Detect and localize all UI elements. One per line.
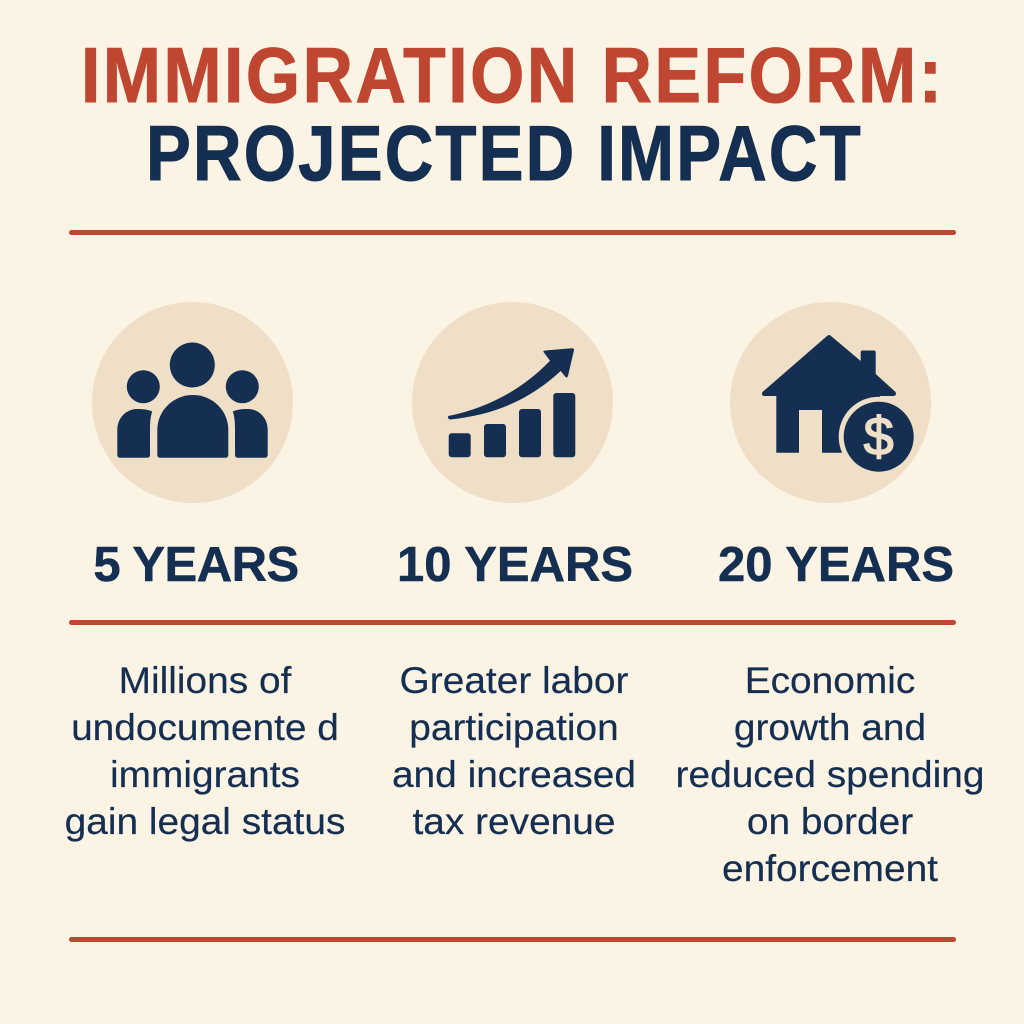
text: 5 years outcome: gain legal status bbox=[65, 801, 345, 842]
text: 10 years outcome: participation bbox=[409, 707, 618, 748]
icon: house with dollar: $ bbox=[864, 407, 894, 467]
icon: people group bbox=[92, 302, 293, 503]
text: 10 years outcome: and increased bbox=[391, 754, 636, 795]
text: 20 years outcome: growth and bbox=[734, 707, 926, 748]
title: IMMIGRATION REFORM: bbox=[81, 31, 944, 119]
icon: growth chart bbox=[412, 302, 613, 503]
text: 5 years outcome: immigrants bbox=[110, 754, 300, 795]
text: 5 years outcome bbox=[65, 660, 345, 842]
text: 10 years outcome: Greater labor bbox=[399, 660, 628, 701]
text: 5 years outcome: undocumente d bbox=[71, 707, 339, 748]
text: 20 years outcome: on border bbox=[747, 801, 913, 842]
text: 10 years outcome: tax revenue bbox=[412, 801, 615, 842]
text: 20 years outcome bbox=[676, 660, 984, 889]
text: 20 years outcome: reduced spending bbox=[676, 754, 984, 795]
label: 20 years: 20 YEARS bbox=[718, 538, 954, 592]
text: 20 years outcome: Economic bbox=[745, 660, 915, 701]
text: 10 years outcome bbox=[391, 660, 636, 842]
title bbox=[81, 31, 944, 197]
label: 10 years: 10 YEARS bbox=[397, 538, 633, 592]
label: 5 years: 5 YEARS bbox=[93, 538, 299, 592]
title: PROJECTED IMPACT bbox=[146, 109, 863, 197]
text: 20 years outcome: enforcement bbox=[722, 848, 938, 889]
text: 5 years outcome: Millions of bbox=[119, 660, 291, 701]
icon: house with dollar bbox=[730, 302, 931, 503]
